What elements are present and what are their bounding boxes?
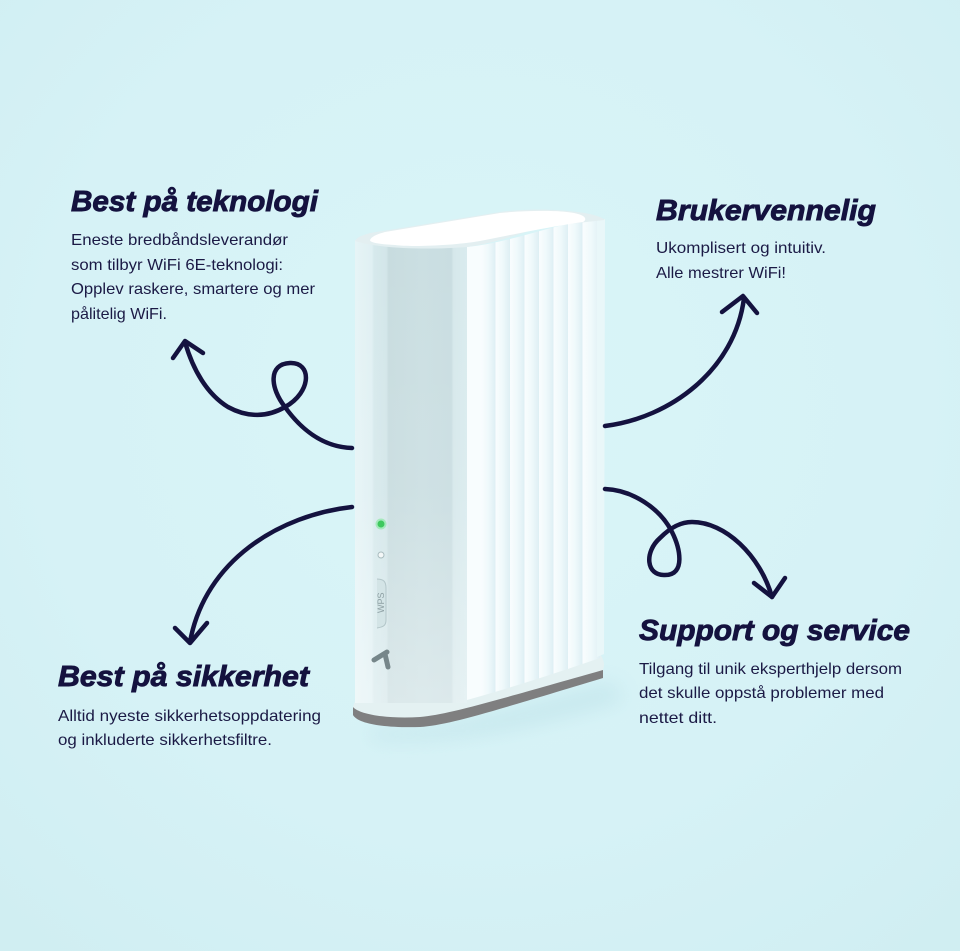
body text (639, 661, 902, 727)
heading: Support og service (639, 615, 910, 647)
body text (58, 708, 321, 749)
body text: Eneste bredbåndsleverandør (71, 231, 289, 249)
heading: Best på sikkerhet (58, 661, 310, 693)
text block: Best på teknologi (71, 186, 319, 323)
body text: og inkluderte sikkerhetsfiltre. (58, 732, 272, 749)
router base plate (353, 654, 604, 718)
status light: green (376, 518, 386, 530)
body text: Opplev raskere, smartere og mer (71, 281, 316, 298)
body text: pålitelig WiFi. (71, 305, 167, 323)
body text (656, 240, 826, 282)
WPS button (376, 579, 386, 628)
router device (353, 210, 625, 741)
text block: Best på sikkerhet (58, 661, 321, 749)
heading: Best på teknologi (71, 186, 319, 218)
status light: white (378, 552, 384, 558)
right edge (597, 219, 605, 657)
front face (355, 240, 467, 703)
body text: Tilgang til unik eksperthjelp dersom (639, 661, 902, 678)
router shadow (370, 682, 625, 741)
body text: som tilbyr WiFi 6E-teknologi: (71, 257, 283, 274)
body text: Alltid nyeste sikkerhetsoppdatering (58, 708, 321, 725)
arrow: to Support og service (605, 489, 785, 597)
ribbed side face (467, 215, 600, 710)
body text: Ukomplisert og intuitiv. (656, 240, 826, 257)
top surface (370, 211, 585, 246)
WPS button: WPS (376, 592, 386, 613)
router base (353, 669, 603, 727)
body text: det skulle oppstå problemer med (639, 684, 884, 702)
arrow: to Best på sikkerhet (175, 507, 352, 643)
arrow: to Best på teknologi (173, 341, 352, 448)
arrow: to Brukervennelig (605, 296, 757, 426)
heading: Brukervennelig (656, 195, 876, 227)
body text: nettet ditt. (639, 710, 717, 727)
text block: Brukervennelig (656, 195, 876, 282)
body text: Alle mestrer WiFi! (656, 265, 786, 282)
top rim (355, 210, 605, 249)
body text (71, 231, 316, 323)
text block: Support og service (639, 615, 910, 727)
Telenor logo (374, 652, 388, 667)
